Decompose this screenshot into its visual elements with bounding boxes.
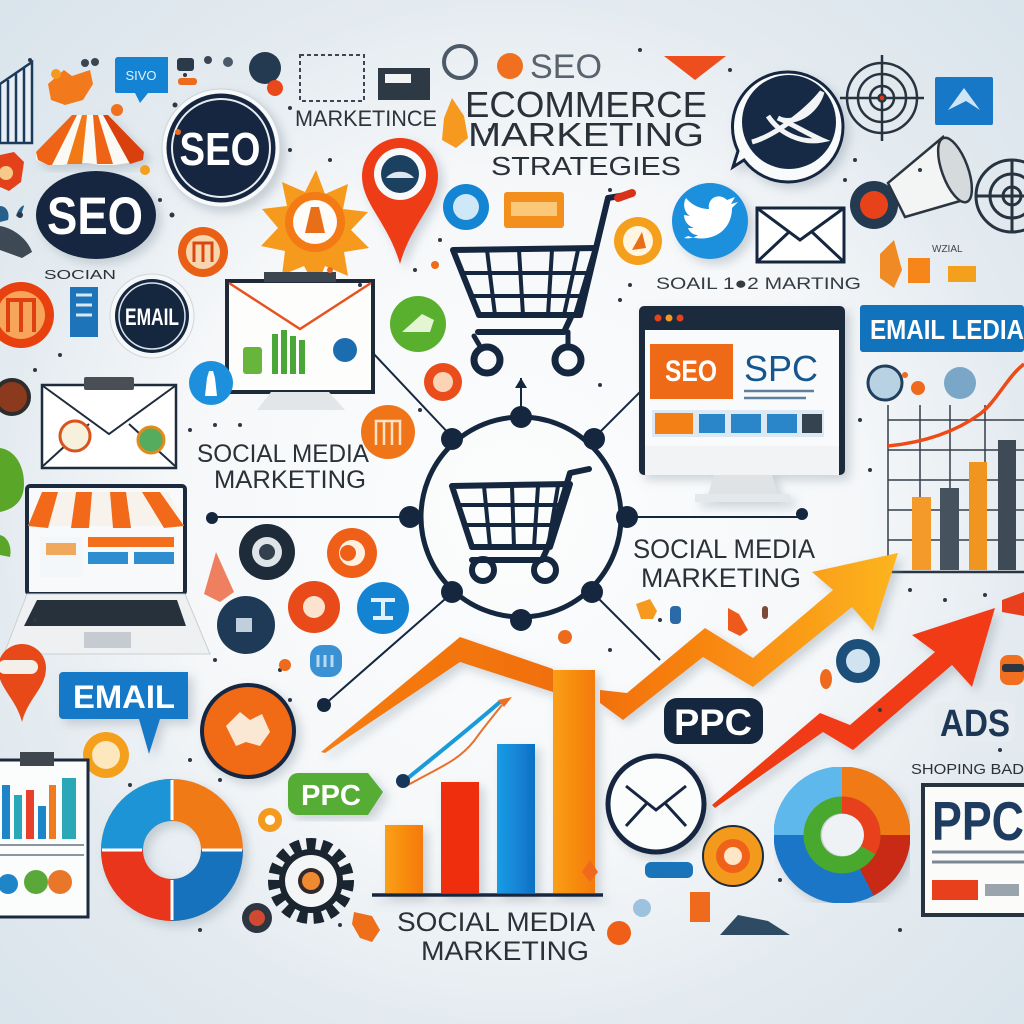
monitor: SEO PPC screen: SPC — [744, 348, 818, 389]
icon: orange blob — [352, 912, 380, 942]
icon: small chart top left — [0, 62, 32, 143]
icon: orange grid circle — [361, 405, 415, 459]
top SEO label: SEO — [530, 48, 602, 86]
label: social media marketing left: SOCIAL MEDIA — [197, 440, 369, 468]
top SEO label — [444, 46, 726, 86]
icon: target right edge — [976, 160, 1024, 232]
icon: envelope — [757, 208, 844, 262]
tag: PPC dark: PPC — [674, 702, 752, 743]
monitor: envelope dashboard — [227, 272, 373, 410]
label: social media marketing bottom — [397, 907, 595, 966]
icon: pink bottle — [204, 552, 234, 602]
icon: envelope round — [608, 756, 704, 852]
hub diagram — [206, 352, 808, 712]
tag: PPC dark — [664, 698, 763, 744]
donut chart: right — [790, 783, 894, 887]
monitor: SEO PPC screen — [639, 306, 845, 502]
label: shopping bad: SHOPING BAD — [911, 761, 1024, 778]
icon: orange circle medal — [83, 732, 129, 778]
label: social media marketing right — [633, 534, 815, 593]
icon: marketing label and dashboard: MARKETINCE — [295, 106, 437, 131]
label: social media marketing left: MARKETING — [214, 466, 366, 494]
badge: SEO round top: SEO — [180, 123, 260, 175]
icon: X circle speech — [732, 72, 843, 182]
icons: right row shapes: WZIAL — [932, 244, 963, 255]
icon: small orange medal — [258, 808, 282, 832]
label: social media marketing right: MARKETING — [641, 563, 801, 593]
icon: dark round small — [81, 52, 283, 96]
icon: orange card — [504, 192, 564, 228]
icon: pencil trend line — [396, 697, 512, 788]
icon: orange medal — [703, 826, 763, 886]
label: ads: ADS — [940, 703, 1010, 745]
label: social small: SOCIAN — [44, 267, 116, 282]
chart: rising zigzag arrow — [321, 637, 553, 753]
icon: green circle — [390, 296, 446, 352]
icon: gear dark — [239, 524, 295, 580]
badge: SEO pill left — [36, 171, 156, 259]
icon: leaf small — [0, 535, 11, 557]
icon: left edge red badge — [0, 152, 24, 191]
bar chart: right — [880, 364, 1024, 572]
icon: small blue — [310, 645, 342, 677]
badge: SEO round top — [162, 89, 280, 207]
icons: bottom scatter — [582, 860, 790, 945]
donut chart: left — [102, 780, 242, 920]
chart: clipboard bars — [0, 752, 88, 917]
tag: PPC green — [288, 773, 383, 815]
icons: right row shapes — [880, 240, 976, 288]
arrow: red up — [712, 608, 995, 808]
icon: dark badge — [217, 596, 275, 654]
icon: clipboard envelope — [42, 377, 176, 468]
icon: top-left speech tag — [115, 57, 168, 103]
icon: blue doc — [70, 287, 98, 337]
icon: left edge blue and grey shapes — [0, 205, 32, 258]
icon: left gear — [0, 380, 29, 414]
monitor: SEO PPC screen: SEO — [665, 355, 717, 388]
icon: round orange — [178, 227, 228, 277]
badge: email round — [110, 274, 194, 358]
icon: red smile — [288, 581, 340, 633]
icon: hub cart — [452, 469, 589, 581]
icon: store awning — [36, 115, 144, 165]
icons: small blue blobs — [868, 366, 976, 400]
icons: arrow-side fragments — [636, 592, 1024, 689]
icon: location pin — [362, 138, 438, 264]
badge: SEO pill left: SEO — [47, 187, 143, 246]
icon: blue tree — [357, 582, 409, 634]
title: ECOMMERCE — [465, 84, 707, 125]
label: social media marketing left — [197, 440, 369, 494]
icon: orange ring — [327, 528, 377, 578]
label: email marketing: SOAIL 1●2 MARTING — [656, 274, 861, 293]
icon: pin left — [0, 644, 46, 722]
card: PPC — [923, 785, 1024, 915]
icon: small dark red — [242, 903, 272, 933]
tag: PPC green: PPC — [301, 780, 361, 812]
icon: round blue — [443, 184, 489, 230]
icon: megaphone — [850, 134, 979, 229]
badge: orange round — [200, 683, 296, 779]
title: STRATEGIES — [491, 151, 681, 181]
tag: email media — [860, 305, 1024, 352]
icon: blue square — [935, 77, 993, 125]
bar chart: centre — [372, 670, 603, 895]
tag: email speech — [59, 672, 188, 754]
badge: left edge orange — [0, 282, 54, 348]
tag: email speech: EMAIL — [73, 679, 175, 715]
laptop: storefront — [4, 486, 210, 654]
label: social media marketing right: SOCIAL MEDIA — [633, 534, 815, 564]
icon: small blue circle — [836, 639, 880, 683]
label: social media marketing bottom: SOCIAL MEDIA — [397, 907, 595, 937]
label: social media marketing bottom: MARKETING — [421, 936, 589, 966]
title: MARKETING — [468, 116, 704, 153]
arrow: orange up — [600, 553, 898, 720]
icon: marketing label and dashboard — [295, 55, 468, 148]
icon: top-left speech tag: SIVO — [125, 68, 157, 83]
icon: gear cog — [275, 845, 347, 917]
icon: twitter circle — [672, 183, 748, 259]
icon: orange flourish — [48, 69, 150, 175]
icon: orange target circle — [614, 217, 662, 265]
icon: blue bottle badge — [189, 361, 233, 405]
icon: target — [840, 55, 924, 141]
badge: email round: EMAIL — [125, 304, 179, 331]
icon: red small circle — [424, 363, 462, 401]
icon: shopping cart large — [453, 194, 632, 373]
title — [465, 84, 707, 181]
icon: sun badge — [261, 170, 369, 288]
icon: leaf — [0, 448, 24, 512]
